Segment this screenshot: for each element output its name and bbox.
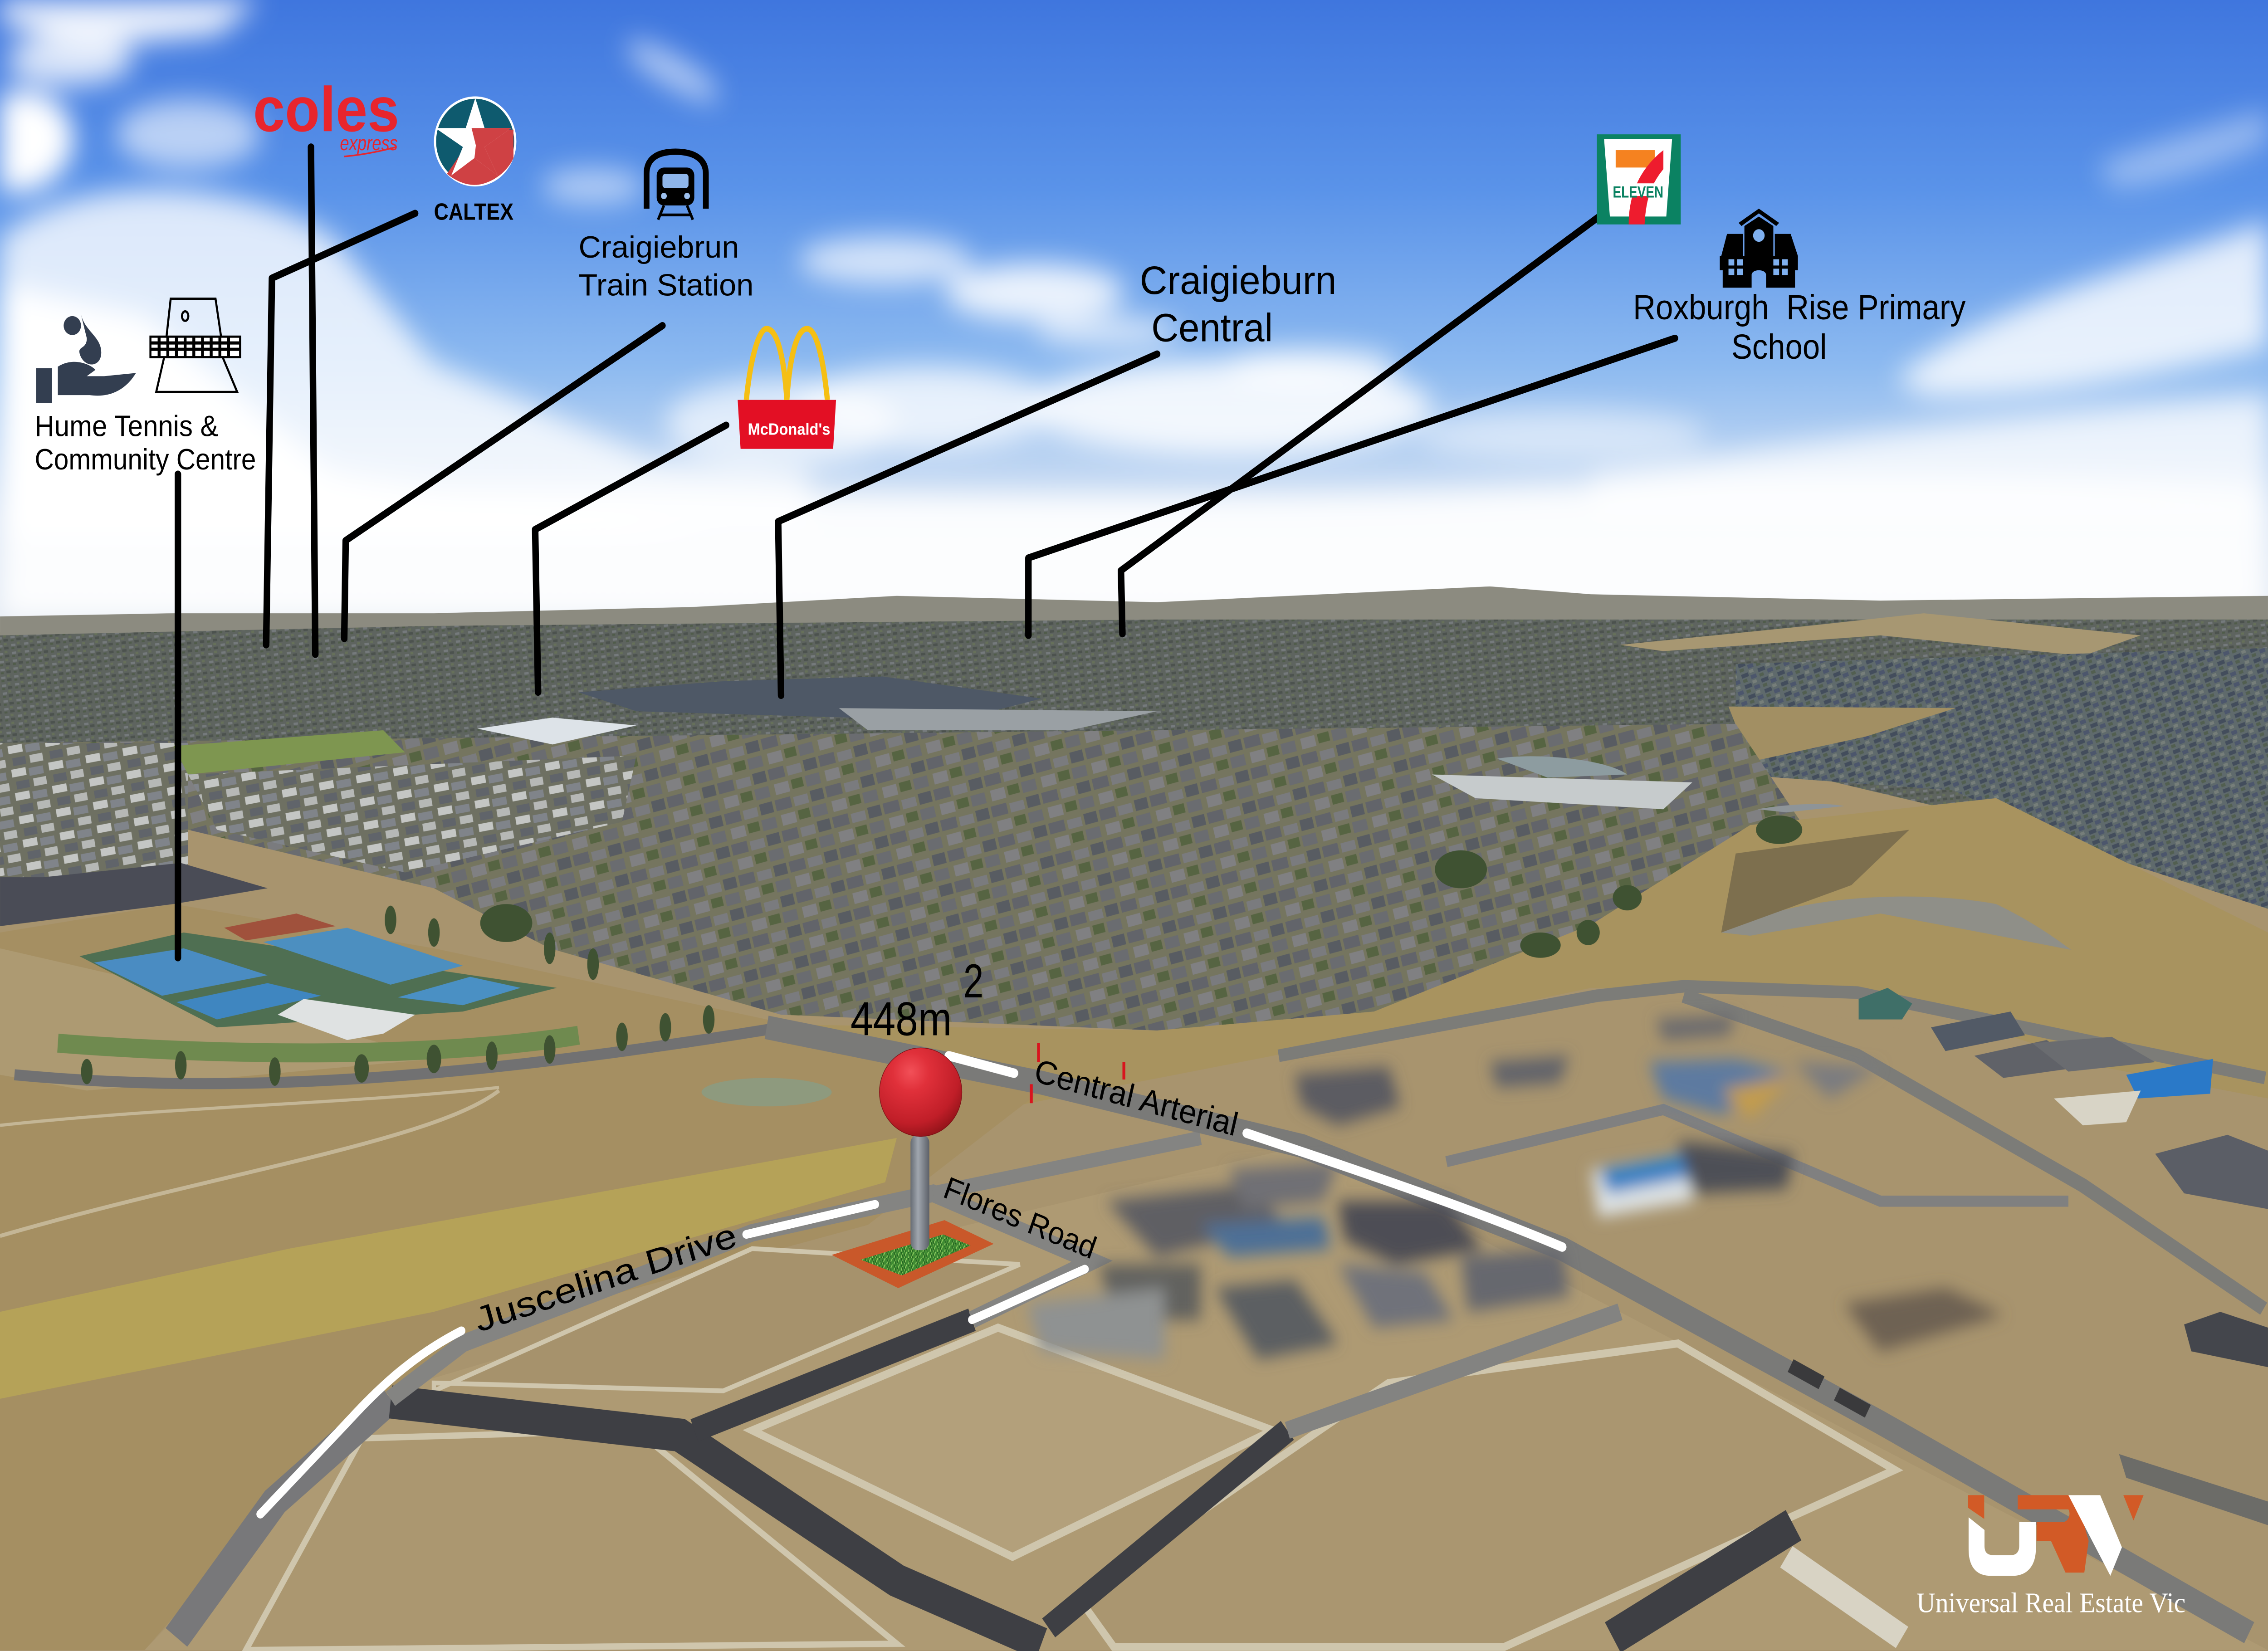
logo: Coles Express: express	[340, 132, 398, 155]
logo: Caltex	[434, 97, 516, 225]
new-build houses upper right	[1859, 988, 2268, 1525]
label: Hume Tennis & Community Centre	[35, 410, 256, 476]
pin head	[880, 1048, 962, 1136]
Flores Road highlight stroke	[972, 1269, 1085, 1320]
label: Craigieburn Central	[1140, 258, 1336, 350]
logo: 7-Eleven: ELEVEN	[1613, 184, 1663, 201]
sky with clouds	[0, 0, 2268, 632]
label: land size 448m²: 2	[963, 955, 983, 1008]
label: land size 448m²: 448m	[850, 993, 952, 1045]
property marker pin	[832, 1048, 994, 1288]
label: Craigiebrun Train Station: Craigiebrun	[579, 230, 739, 264]
label: Craigieburn Central: Craigieburn	[1140, 258, 1336, 303]
lot base with grass	[832, 1220, 994, 1288]
label: Roxburgh Rise Primary School: School	[1731, 327, 1827, 366]
logo: Universal Real Estate Vic	[1916, 1495, 2185, 1619]
label: Craigieburn Central: Central	[1151, 305, 1273, 350]
red boundary markers	[1031, 1043, 1124, 1103]
logo: Caltex: CALTEX	[434, 198, 513, 225]
aerial photo: distant hills and suburbs	[0, 586, 2268, 1031]
logo: Coles Express: coles	[253, 74, 399, 145]
label: Hume Tennis & Community Centre: Hume Tennis &	[35, 410, 219, 443]
aerial photo: foreground estate roads and lots	[145, 986, 2268, 1650]
logo: 7-Eleven	[1597, 134, 1681, 225]
label: Hume Tennis & Community Centre: Community Centre	[35, 444, 256, 476]
Juscelina Drive highlight strokes	[260, 1204, 875, 1514]
connector lines from landmarks	[178, 147, 1675, 958]
icon: train	[646, 152, 706, 220]
blurred houses	[1027, 1015, 2003, 1359]
road name: Flores Road: Flores Road	[939, 1170, 1101, 1266]
logo: Universal Real Estate Vic: Universal Real Estate Vic	[1916, 1587, 2185, 1619]
pin pole	[910, 1135, 929, 1250]
aerial photo: grasslands and park	[0, 798, 2268, 1650]
label: Craigiebrun Train Station	[579, 230, 753, 302]
road name: Juscelina Drive: Juscelina Drive	[470, 1215, 741, 1339]
logo: McDonald's: McDonald's	[748, 420, 830, 439]
trucks on the arterial road	[1788, 1359, 1871, 1417]
icon: community hand and ball	[36, 314, 136, 403]
icon: school	[1720, 209, 1798, 288]
Central Arterial highlight strokes	[949, 1056, 1562, 1247]
icon: tennis court	[151, 299, 240, 392]
park trees	[81, 816, 1802, 1086]
label: Roxburgh Rise Primary School: Roxburgh Rise Primary	[1633, 288, 1966, 327]
logo: McDonald's	[738, 329, 836, 449]
label: land size 448m²	[850, 955, 983, 1045]
tennis courts	[79, 913, 557, 1040]
label: Roxburgh Rise Primary School	[1633, 288, 1966, 366]
road name: Central Arterial: Central Arterial	[1031, 1052, 1242, 1143]
label: Craigiebrun Train Station: Train Station	[579, 268, 753, 302]
